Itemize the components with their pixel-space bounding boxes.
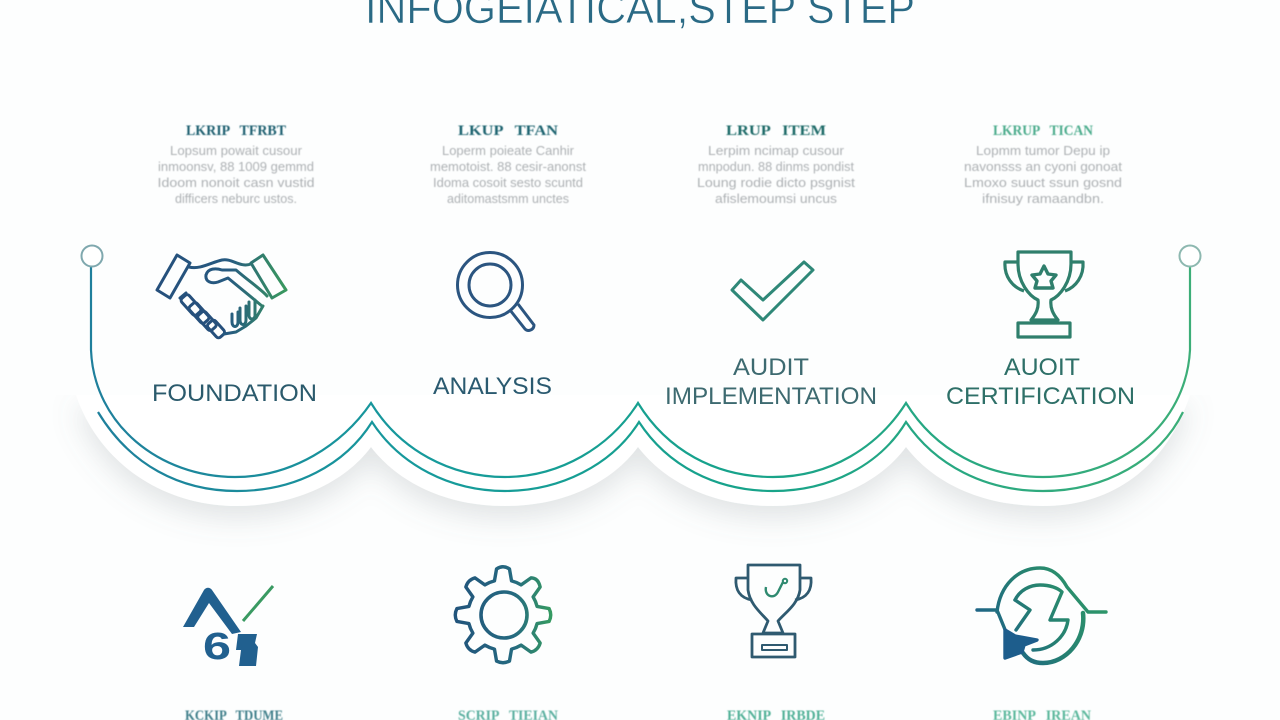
text block: column 2: Idoma cosoit sesto scuntd bbox=[433, 175, 583, 190]
label: audit implementation: AUDIT bbox=[733, 354, 809, 381]
timeline: lower scalloped line bbox=[98, 412, 1183, 491]
text block: column 4: LKRUP TICAN bbox=[993, 123, 1093, 139]
label: audit certification: AUOIT bbox=[1004, 354, 1080, 381]
text block: column 3: Loung rodie dicto psgnist bbox=[697, 175, 855, 190]
text block: column 2 bbox=[430, 123, 586, 206]
text block: column 2: LKUP TFAN bbox=[458, 123, 558, 139]
panel: top text columns bbox=[158, 123, 1122, 206]
label: audit implementation: IMPLEMENTATION bbox=[665, 383, 877, 410]
end node bbox=[1180, 246, 1200, 266]
icon: handshake bbox=[157, 255, 286, 339]
text block: column 3: LRUP ITEM bbox=[726, 123, 826, 139]
icon: trophy with ribbon bbox=[736, 565, 811, 657]
text block: column 2: memotoist. 88 cesir-anonst bbox=[430, 159, 586, 174]
label: foundation: FOUNDATION bbox=[152, 380, 317, 407]
text block: column 4 bbox=[964, 123, 1122, 206]
text block: column 3: afislemoumsi uncus bbox=[715, 191, 838, 206]
text block: column 2: Loperm poieate Canhir bbox=[442, 143, 575, 158]
icon: gear bbox=[455, 567, 551, 663]
panel: bottom labels bbox=[185, 708, 1091, 720]
panel: scalloped white card bbox=[76, 395, 1190, 506]
icon: peak with pen and figures: 6 bbox=[203, 626, 231, 668]
icon: trophy with star bbox=[1005, 252, 1083, 337]
text block: column 1: Idoom nonoit casn vustid bbox=[158, 175, 314, 190]
text block: column 2: aditomastsmm unctes bbox=[447, 191, 569, 206]
text block: column 3: mnpodun. 88 dinms pondist bbox=[698, 159, 854, 174]
icon: check mark bbox=[732, 262, 813, 320]
timeline: upper scalloped line bbox=[91, 267, 1190, 477]
text block: column 4: ifnisuy ramaandbn. bbox=[982, 191, 1104, 206]
text block: column 1: inmoonsv, 88 1009 gemmd bbox=[158, 159, 314, 174]
text block: column 4: Lmoxo suuct ssun gosnd bbox=[964, 175, 1122, 190]
start node bbox=[82, 246, 102, 266]
icon: magnifier bbox=[458, 252, 534, 330]
text block: column 1: LKRIP TFRBT bbox=[186, 123, 286, 139]
label: audit certification bbox=[946, 354, 1135, 410]
text block: column 4: navonsss an cyoni gonoat bbox=[964, 159, 1122, 174]
text block: column 1: Lopsum powait cusour bbox=[170, 143, 303, 158]
icon: cycle arrows bbox=[977, 568, 1106, 663]
text block: column 3: Lerpim ncimap cusour bbox=[708, 143, 845, 158]
text block: column 1: difficers neburc ustos. bbox=[175, 191, 297, 206]
text block: column 1 bbox=[158, 123, 314, 206]
text block: column 4: Lopmm tumor Depu ip bbox=[976, 143, 1110, 158]
icon: peak with pen and figures bbox=[183, 586, 273, 668]
label: analysis: ANALYSIS bbox=[433, 373, 552, 400]
label: audit certification: CERTIFICATION bbox=[946, 383, 1135, 410]
label: audit implementation bbox=[665, 354, 877, 410]
text block: column 3 bbox=[697, 123, 855, 206]
